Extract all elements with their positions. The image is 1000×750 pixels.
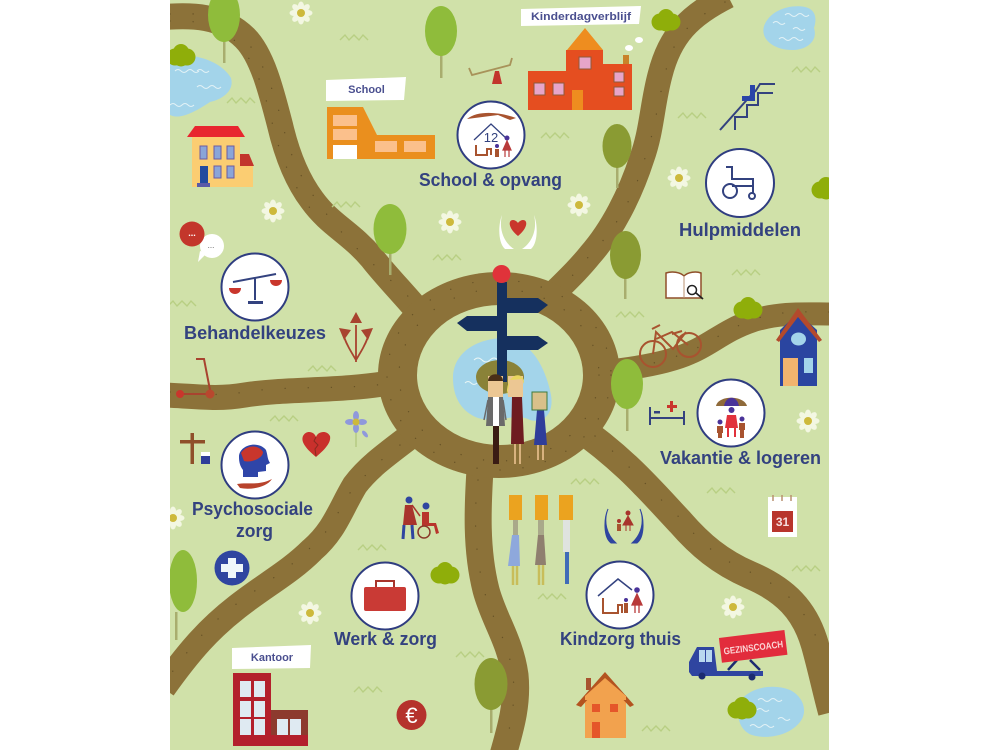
label: Psychosociale zorg <box>192 499 313 541</box>
road: top-left <box>165 16 430 325</box>
label: Psychosociale zorg: Psychosociale <box>192 499 313 519</box>
icon: stair lift <box>720 84 775 130</box>
road: bottom-right <box>575 425 832 712</box>
tree 4 <box>602 124 632 188</box>
icon: plus badge <box>214 550 250 586</box>
road: bottom-left <box>163 425 425 688</box>
label: Hulpmiddelen: Hulpmiddelen <box>679 220 801 240</box>
building: kantoor <box>233 673 308 746</box>
pond: top right <box>763 6 815 50</box>
signpost <box>457 265 548 382</box>
icon: lawnmower <box>176 359 214 398</box>
girl <box>532 392 547 460</box>
icon: cross and candle <box>180 433 210 464</box>
building: school <box>327 107 435 159</box>
circle: School & opvang <box>458 102 524 168</box>
icon: hospital bed <box>650 401 684 425</box>
roundabout <box>378 272 620 478</box>
label: Kindzorg thuis: Kindzorg thuis <box>560 629 681 649</box>
road: top-right <box>545 0 728 302</box>
tree 5 <box>610 231 641 299</box>
tree 6 <box>611 359 643 431</box>
roundabout centre island <box>417 305 583 445</box>
roads <box>163 0 832 750</box>
icon: three arrows <box>339 312 373 362</box>
circle: School & opvang: 12 <box>484 130 498 145</box>
label: Werk & zorg: Werk & zorg <box>334 629 437 649</box>
icon: speech bubbles: ... <box>188 228 196 238</box>
circle: Werk & zorg <box>352 562 418 630</box>
tree 7 <box>169 550 197 640</box>
tag: School <box>326 77 406 101</box>
tag: Kantoor: Kantoor <box>251 652 294 664</box>
woman <box>507 375 524 464</box>
icon: speech bubbles: ... <box>208 241 214 250</box>
icon: heart in hands <box>499 215 537 249</box>
label: Behandelkeuzes: Behandelkeuzes <box>184 323 326 343</box>
tag: Kinderdagverblijf <box>521 6 641 26</box>
circle: Behandelkeuzes <box>222 254 288 320</box>
trees <box>169 0 643 733</box>
icon: bicycle <box>640 325 701 367</box>
tag: Kinderdagverblijf: Kinderdagverblijf <box>531 11 631 23</box>
map <box>170 0 829 750</box>
label: School & opvang: School & opvang <box>419 170 562 190</box>
pond: top left <box>170 55 232 117</box>
icon: broken heart <box>302 432 330 457</box>
tree 2 <box>425 6 457 78</box>
icon: speech bubbles <box>180 222 224 262</box>
icon: book and magnifier <box>666 272 703 299</box>
building: orange house <box>576 672 634 738</box>
grass tufts <box>168 35 820 731</box>
pond: bottom right <box>738 687 804 737</box>
tree 8 <box>474 658 508 733</box>
road: left <box>165 382 395 397</box>
icon: calendar: 31 <box>776 515 789 529</box>
person left <box>508 495 522 585</box>
three people <box>508 495 573 585</box>
road gravel dots <box>170 14 412 300</box>
background: grass <box>170 0 829 750</box>
icon: euro coin: € <box>405 703 418 728</box>
circle: Hulpmiddelen <box>706 149 774 217</box>
tag: School: School <box>348 84 385 96</box>
man <box>484 374 506 464</box>
building: kinderdagverblijf <box>528 28 643 110</box>
road: right <box>600 314 832 372</box>
person right <box>559 495 573 584</box>
central family <box>484 374 547 464</box>
circle: Kindzorg thuis <box>586 562 654 628</box>
tree 3 <box>374 204 406 275</box>
circle: Vakantie & logeren <box>698 380 764 446</box>
truck: gezinscoach: GEZINSCOACH <box>723 639 784 657</box>
building: blue house <box>776 308 822 386</box>
pond: centre <box>453 338 552 421</box>
circle: Psychosociale zorg <box>222 432 288 498</box>
road: bottom-centre <box>478 455 516 750</box>
person middle <box>535 495 548 585</box>
truck: gezinscoach <box>689 630 787 680</box>
icon: euro coin <box>396 700 426 730</box>
flowers <box>162 2 820 624</box>
icon: seesaw <box>469 58 512 84</box>
bushes <box>166 9 840 720</box>
icon: calendar <box>768 495 797 537</box>
icon: blue flower <box>345 411 369 447</box>
tag: Kantoor <box>232 645 311 669</box>
building: yellow house <box>187 126 254 187</box>
label: Vakantie & logeren: Vakantie & logeren <box>660 448 821 468</box>
icon: caregiver and wheelchair <box>403 496 439 539</box>
tree 1 <box>208 0 240 63</box>
icon: family in hands <box>605 509 643 543</box>
label: Psychosociale zorg: zorg <box>236 521 273 541</box>
